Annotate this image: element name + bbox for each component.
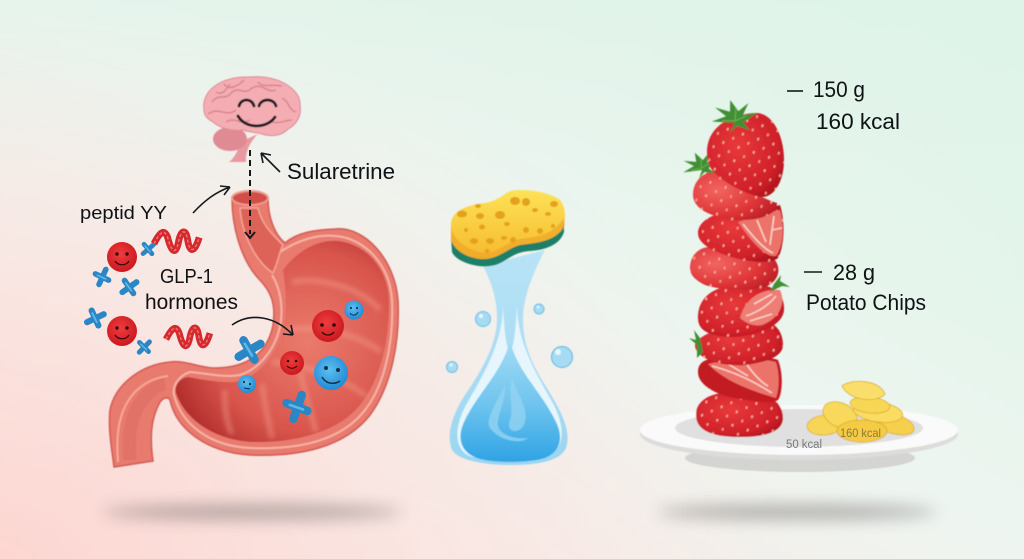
blue ball small upper — [344, 300, 364, 320]
blue molecule — [142, 242, 154, 256]
blue molecule — [95, 269, 109, 285]
brain — [204, 77, 300, 162]
strawberry 6 — [689, 322, 783, 365]
stomach — [109, 191, 398, 467]
callout: 150 g — [787, 77, 865, 102]
arrow to Sularetrine — [261, 153, 280, 172]
plate — [640, 405, 958, 472]
sponge — [451, 190, 565, 266]
strawberry 3 cut — [698, 205, 784, 262]
water bubble — [476, 312, 490, 326]
blue molecule large — [286, 395, 308, 419]
arrow from peptid YY — [193, 186, 230, 213]
blue ball small lower — [238, 375, 256, 393]
label: 160 kcal on chips: 160 kcal — [840, 426, 881, 440]
red hormone ball lower — [107, 316, 137, 346]
peptide ribbon lower — [166, 328, 210, 346]
strawberry 8 — [696, 392, 783, 437]
water bubble — [534, 304, 544, 314]
chips pile — [806, 381, 917, 442]
strawberry 2 leaves — [679, 147, 722, 182]
floor shadow: left — [102, 505, 402, 519]
cerebellum — [213, 127, 247, 151]
strawberry 4 — [690, 247, 778, 289]
label: 50 kcal: 50 kcal — [786, 439, 822, 451]
blue molecule — [138, 340, 150, 354]
water bubble — [446, 362, 458, 372]
water bubble — [552, 346, 572, 368]
red hormone ball in stomach small — [280, 351, 304, 375]
panel: sponge and water — [446, 190, 572, 465]
callout: 160 kcal: 160 kcal — [816, 109, 900, 134]
blue molecule large — [236, 337, 262, 363]
label: GLP-1: GLP-1 — [160, 265, 213, 288]
peptide ribbon upper — [154, 232, 199, 251]
arrow from hormones — [232, 317, 293, 335]
brain stem — [229, 134, 258, 162]
red hormone ball in stomach large — [312, 310, 344, 342]
label: hormones: hormones — [145, 291, 238, 314]
strawberry 1 — [707, 113, 784, 197]
label: Sularetrine: Sularetrine — [287, 159, 395, 184]
strawberry 5 cut — [698, 275, 790, 337]
floor shadow: right — [657, 505, 937, 519]
strawberry 7 cut — [698, 357, 782, 402]
smiling face — [238, 100, 276, 126]
panel: gut-brain illustration — [80, 77, 398, 467]
blue molecule — [85, 308, 105, 328]
red hormone ball upper — [107, 242, 137, 272]
label: peptid YY: peptid YY — [80, 202, 167, 223]
blue molecule — [121, 278, 137, 296]
blue ball large — [314, 356, 348, 390]
callout: 28 g: 28 g — [833, 260, 875, 285]
callout: 28 g — [804, 260, 875, 285]
callout: 150 g: 150 g — [813, 77, 865, 102]
cerebrum — [204, 77, 300, 136]
dashed signal arrow — [245, 150, 255, 238]
strawberry 2 — [693, 170, 777, 220]
water stream — [450, 250, 568, 465]
callout: Potato Chips: Potato Chips — [806, 290, 926, 315]
strawberry 1 leaves — [710, 98, 759, 134]
panel: strawberries vs chips on plate — [640, 98, 958, 472]
